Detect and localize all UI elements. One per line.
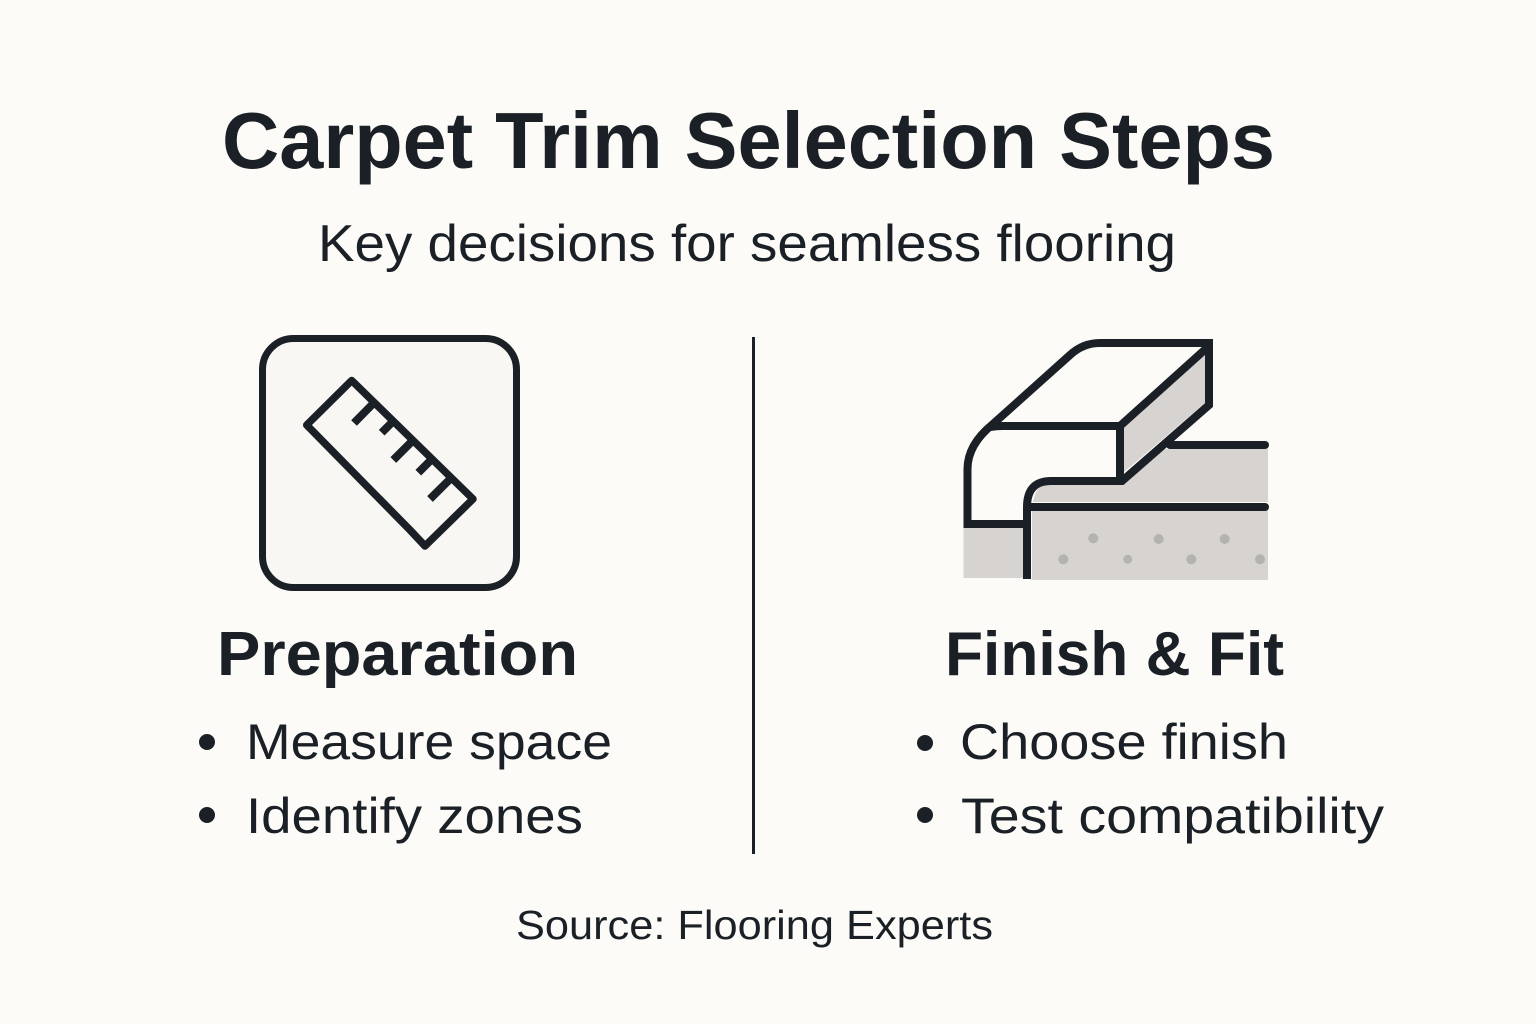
bullet — [917, 807, 933, 823]
list: finish and fit items — [917, 714, 1384, 844]
panel: finish and fit — [917, 343, 1384, 844]
heading: preparation: Preparation — [217, 620, 578, 689]
item: measure space: Measure space — [246, 714, 612, 770]
item: choose finish: Choose finish — [960, 714, 1288, 770]
bullet — [199, 734, 215, 750]
subtitle: Key decisions for seamless flooring — [318, 215, 1176, 273]
source note: Source: Flooring Experts — [516, 902, 993, 948]
bullet — [199, 807, 215, 823]
heading: finish and fit: Finish & Fit — [945, 620, 1284, 689]
icon: carpet trim cross-section — [964, 343, 1268, 580]
title: Carpet Trim Selection Steps — [222, 96, 1275, 185]
item: identify zones: Identify zones — [246, 788, 583, 844]
icon: ruler in rounded square — [262, 338, 516, 588]
panel: preparation — [199, 338, 612, 844]
list: preparation items — [199, 714, 612, 844]
item: test compatibility: Test compatibility — [961, 788, 1384, 844]
bullet — [917, 735, 933, 751]
